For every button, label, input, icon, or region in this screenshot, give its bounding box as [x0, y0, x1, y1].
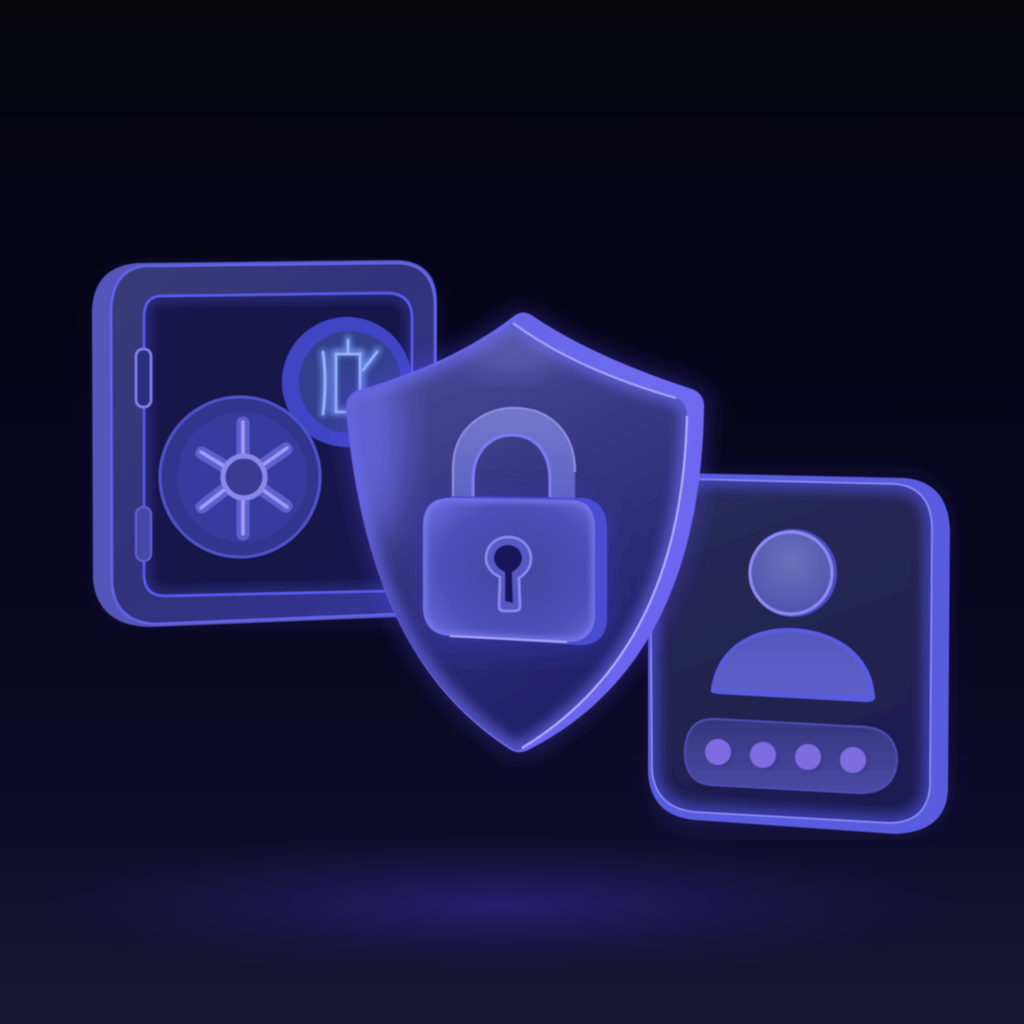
panel: safe: [92, 260, 437, 627]
card face: [650, 479, 932, 823]
padlock body side: [450, 496, 607, 645]
keyhole: [486, 537, 531, 611]
padlock: [423, 408, 607, 646]
small dial: [282, 317, 412, 447]
shield glow: [345, 312, 704, 753]
person head: [749, 529, 837, 617]
shield face: [338, 323, 687, 750]
dial spokes: [202, 423, 286, 534]
safe body: [92, 260, 437, 627]
card glow: [655, 478, 945, 828]
hinge: top: [136, 349, 151, 407]
large dial: [160, 397, 320, 557]
card body: [648, 473, 950, 834]
floor glow: [30, 835, 970, 975]
password dots: [705, 739, 870, 774]
person shoulders: [711, 628, 875, 702]
shield back edge: [346, 312, 704, 752]
padlock body: [423, 498, 595, 642]
safe front face: [111, 263, 435, 624]
illustration: safe, shield and ID card: [0, 254, 1024, 1024]
panel: id card: [648, 473, 950, 834]
hinge: bottom: [136, 507, 151, 561]
password field: [685, 719, 897, 793]
safe door: [144, 293, 412, 596]
panel: shield: [338, 312, 704, 753]
safe glow: [100, 268, 435, 620]
padlock shackle: [453, 408, 575, 505]
padlock glow: [425, 500, 607, 646]
dial hub: [223, 456, 265, 498]
